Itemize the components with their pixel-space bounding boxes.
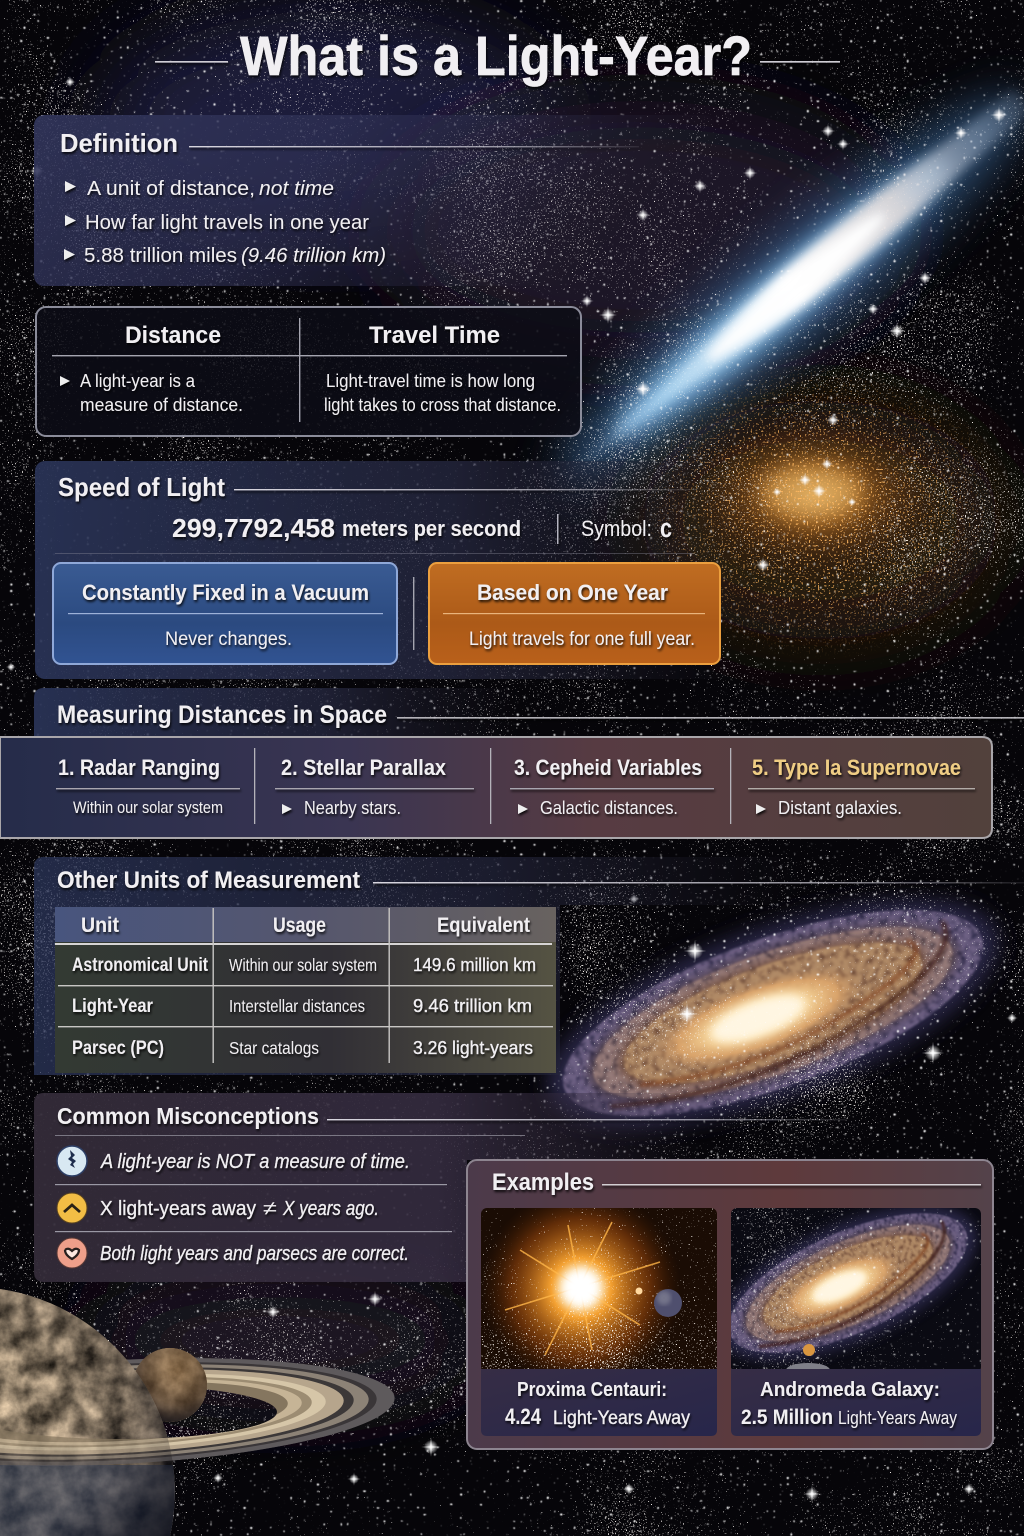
row: parsec: Star catalogs [229, 1038, 319, 1058]
example: proxima centauri: Proxima Centauri: [517, 1379, 667, 1401]
misconception 2: X years ago. [282, 1198, 379, 1220]
method 3 [510, 755, 714, 818]
orange box: based on one year: Based on One Year [477, 580, 668, 605]
blue box: constantly fixed: Never changes. [165, 629, 292, 650]
panel: definition [34, 115, 714, 286]
panel: other units [34, 857, 1024, 1075]
blue box: constantly fixed [53, 563, 397, 664]
method 3: 3. Cepheid Variables [514, 755, 702, 780]
method 2: 2. Stellar Parallax [281, 755, 447, 780]
caption: andromeda [731, 1369, 981, 1436]
distance column [60, 322, 243, 415]
distance column: Distance [125, 322, 221, 349]
row: parsec [72, 1037, 533, 1059]
example: andromeda galaxy: Light-Years Away [838, 1408, 957, 1428]
travel time column [324, 322, 561, 415]
row: light-year: Light-Year [72, 996, 154, 1017]
units table [55, 907, 556, 1073]
travel time column: Travel Time [369, 322, 500, 349]
method 3: Galactic distances. [540, 798, 678, 818]
method 5: Distant galaxies. [778, 798, 902, 818]
title: What is a Light-Year? [240, 24, 752, 87]
example: andromeda galaxy: 2.5 Million [741, 1406, 833, 1429]
misconceptions heading: Common Misconceptions [57, 1103, 319, 1129]
definition bullets [64, 177, 386, 267]
method 2: Nearby stars. [304, 798, 401, 818]
light beam halo [529, 61, 1024, 519]
method 1 [56, 755, 240, 817]
measuring heading: Measuring Distances in Space [57, 701, 387, 729]
examples heading: Examples [492, 1169, 594, 1196]
distance column: measure of distance. [80, 395, 243, 415]
methods band [0, 737, 992, 838]
distance column: A light-year is a [80, 371, 196, 391]
example: andromeda galaxy: Andromeda Galaxy: [760, 1379, 940, 1401]
row: parsec: Parsec (PC) [72, 1038, 164, 1059]
row: astronomical unit: Within our solar system [229, 955, 377, 975]
table header [81, 914, 530, 937]
example: proxima centauri: 4.24 [505, 1404, 542, 1429]
definition bullets: 5.88 trillion miles [84, 244, 237, 267]
misconception 3: Both light years and parsecs are correct. [100, 1243, 409, 1265]
row: light-year: Interstellar distances [229, 996, 365, 1016]
method 5 [748, 755, 975, 818]
units heading: Other Units of Measurement [57, 867, 360, 894]
blue box: constantly fixed: Constantly Fixed in a Vacuum [82, 580, 369, 605]
definition heading: Definition [60, 128, 178, 158]
misconception 2: ≠ [263, 1198, 277, 1220]
row: parsec: 3.26 light-years [413, 1037, 533, 1058]
speed value: c [660, 513, 672, 543]
example: proxima centauri [481, 1188, 717, 1436]
example: proxima centauri: Light-Years Away [553, 1408, 690, 1429]
row: astronomical unit: Astronomical Unit [72, 955, 209, 976]
travel time column: light takes to cross that distance. [324, 395, 561, 415]
row: light-year: 9.46 trillion km [413, 995, 532, 1016]
misconception 2 [57, 1193, 379, 1223]
method 5: 5. Type Ia Supernovae [752, 755, 961, 780]
orange box: based on one year: Light travels for one full year. [469, 629, 695, 650]
definition bullets: not time [259, 177, 334, 200]
definition bullets: How far light travels in one year [85, 211, 369, 234]
misconception 2: X light-years away [100, 1198, 256, 1220]
row: light-year [72, 995, 532, 1017]
image: star and planet [481, 1208, 717, 1369]
definition bullets: A unit of distance, [87, 177, 255, 200]
misconception 3 [57, 1238, 409, 1268]
speed value: 299,7792,458 [172, 513, 335, 543]
caption: proxima [481, 1369, 717, 1436]
panel: measuring distances [0, 688, 1024, 838]
misconception 1: A light-year is NOT a measure of time. [100, 1151, 410, 1173]
table header: Equivalent [437, 914, 530, 937]
row: astronomical unit [72, 954, 536, 976]
orange box: based on one year [429, 563, 720, 664]
image: galaxy [731, 1208, 981, 1369]
example: andromeda galaxy [731, 1208, 981, 1436]
spiral galaxy [521, 853, 1024, 1173]
speed value: meters per second [342, 516, 521, 541]
row: astronomical unit: 149.6 million km [413, 954, 536, 975]
light beam core [547, 83, 1024, 497]
speed value: Symbol: [581, 516, 652, 541]
panel: common misconceptions [34, 1093, 847, 1282]
definition bullets: (9.46 trillion km) [241, 244, 386, 267]
panel: examples [467, 1160, 997, 1449]
table header: Usage [273, 914, 326, 937]
table header: Unit [81, 914, 119, 937]
speed value [172, 513, 672, 544]
method 1: Within our solar system [73, 798, 223, 817]
method 1: 1. Radar Ranging [58, 755, 220, 780]
orange star cluster [636, 364, 1006, 657]
speed heading: Speed of Light [58, 472, 225, 502]
method 2 [275, 755, 474, 818]
travel time column: Light-travel time is how long [326, 371, 535, 391]
ringed planet [0, 1285, 397, 1536]
panel: distance vs travel time [36, 307, 581, 436]
misconception 1 [57, 1146, 410, 1176]
panel: speed of light [35, 461, 735, 679]
